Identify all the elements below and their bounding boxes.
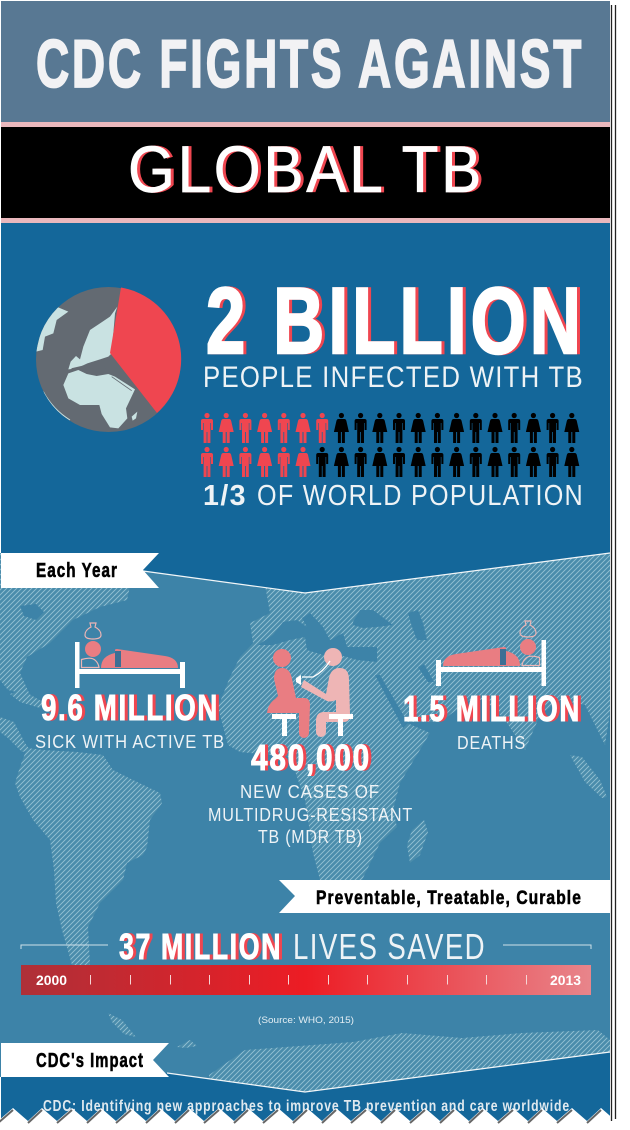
- pictogram: people row two: [201, 447, 579, 477]
- map: south america: [15, 748, 162, 965]
- ribbon: Preventable, Treatable, Curable: [279, 880, 610, 913]
- header panel: CDC Fights Against: [1, 1, 610, 122]
- light blue map band with hatched world map: [0, 540, 630, 1100]
- caption: new cases of multidrug-resistant TB: TB (MDR TB): [258, 827, 363, 847]
- timeline gradient bar 2000 to 2013: [21, 965, 591, 995]
- caption: deaths: DEATHS: [457, 733, 526, 753]
- stat: 1.5 million: 1.5 MILLION: [403, 688, 581, 729]
- caption: 1/3 of world population: 1/3: [203, 480, 247, 512]
- map: antarctica: [209, 1030, 610, 1092]
- map: north america: [0, 553, 130, 694]
- title line two: GLOBAL TB: [128, 132, 484, 206]
- caption: 1/3 of world population: OF WORLD POPULATION: [257, 480, 584, 512]
- source note: (Source: WHO, 2015): [258, 1015, 354, 1026]
- caption: new cases of multidrug-resistant TB: NEW CASES OF: [240, 782, 380, 802]
- heading: 37 million lives saved: 37 MILLION: [119, 926, 282, 967]
- ribbon: CDC's Impact: [1, 1043, 169, 1077]
- ribbon: Each Year: [1, 553, 159, 588]
- stat: 480,000: 480,000: [251, 737, 371, 778]
- heading: 37 million lives saved: [21, 926, 591, 967]
- ribbon: CDC's Impact: CDC's Impact: [36, 1050, 144, 1072]
- main blue background panel: [1, 223, 610, 1123]
- pictogram: people row one: [201, 413, 579, 443]
- torn paper bottom edge: [0, 1108, 630, 1130]
- map: inland seas: [20, 604, 434, 728]
- caption: sick with active TB: SICK WITH ACTIVE TB: [35, 732, 225, 752]
- ribbon: Each Year: Each Year: [36, 560, 118, 582]
- map: sumatra and madagascar: [570, 755, 607, 798]
- page frame lines at right: [612, 5, 616, 1121]
- heading: 37 million lives saved: LIVES SAVED: [293, 926, 486, 967]
- timeline gradient bar 2000 to 2013: 2000: [36, 973, 67, 988]
- map: africa and eurasia: [218, 540, 630, 880]
- icon: deceased patient in bed: [436, 621, 546, 686]
- caption: new cases of multidrug-resistant TB: MULTIDRUG-RESISTANT: [208, 805, 413, 825]
- timeline gradient bar 2000 to 2013: 2013: [550, 973, 581, 988]
- header panel: Global TB: [1, 122, 610, 224]
- stat: 9.6 million: 9.6 MILLION: [41, 687, 219, 728]
- caption: new cases of multidrug-resistant TB: [208, 782, 413, 847]
- pie chart globe: one third infected: [36, 287, 181, 432]
- icon: sick patient in bed: [75, 623, 185, 688]
- icon: doctor examining patient: [267, 648, 353, 738]
